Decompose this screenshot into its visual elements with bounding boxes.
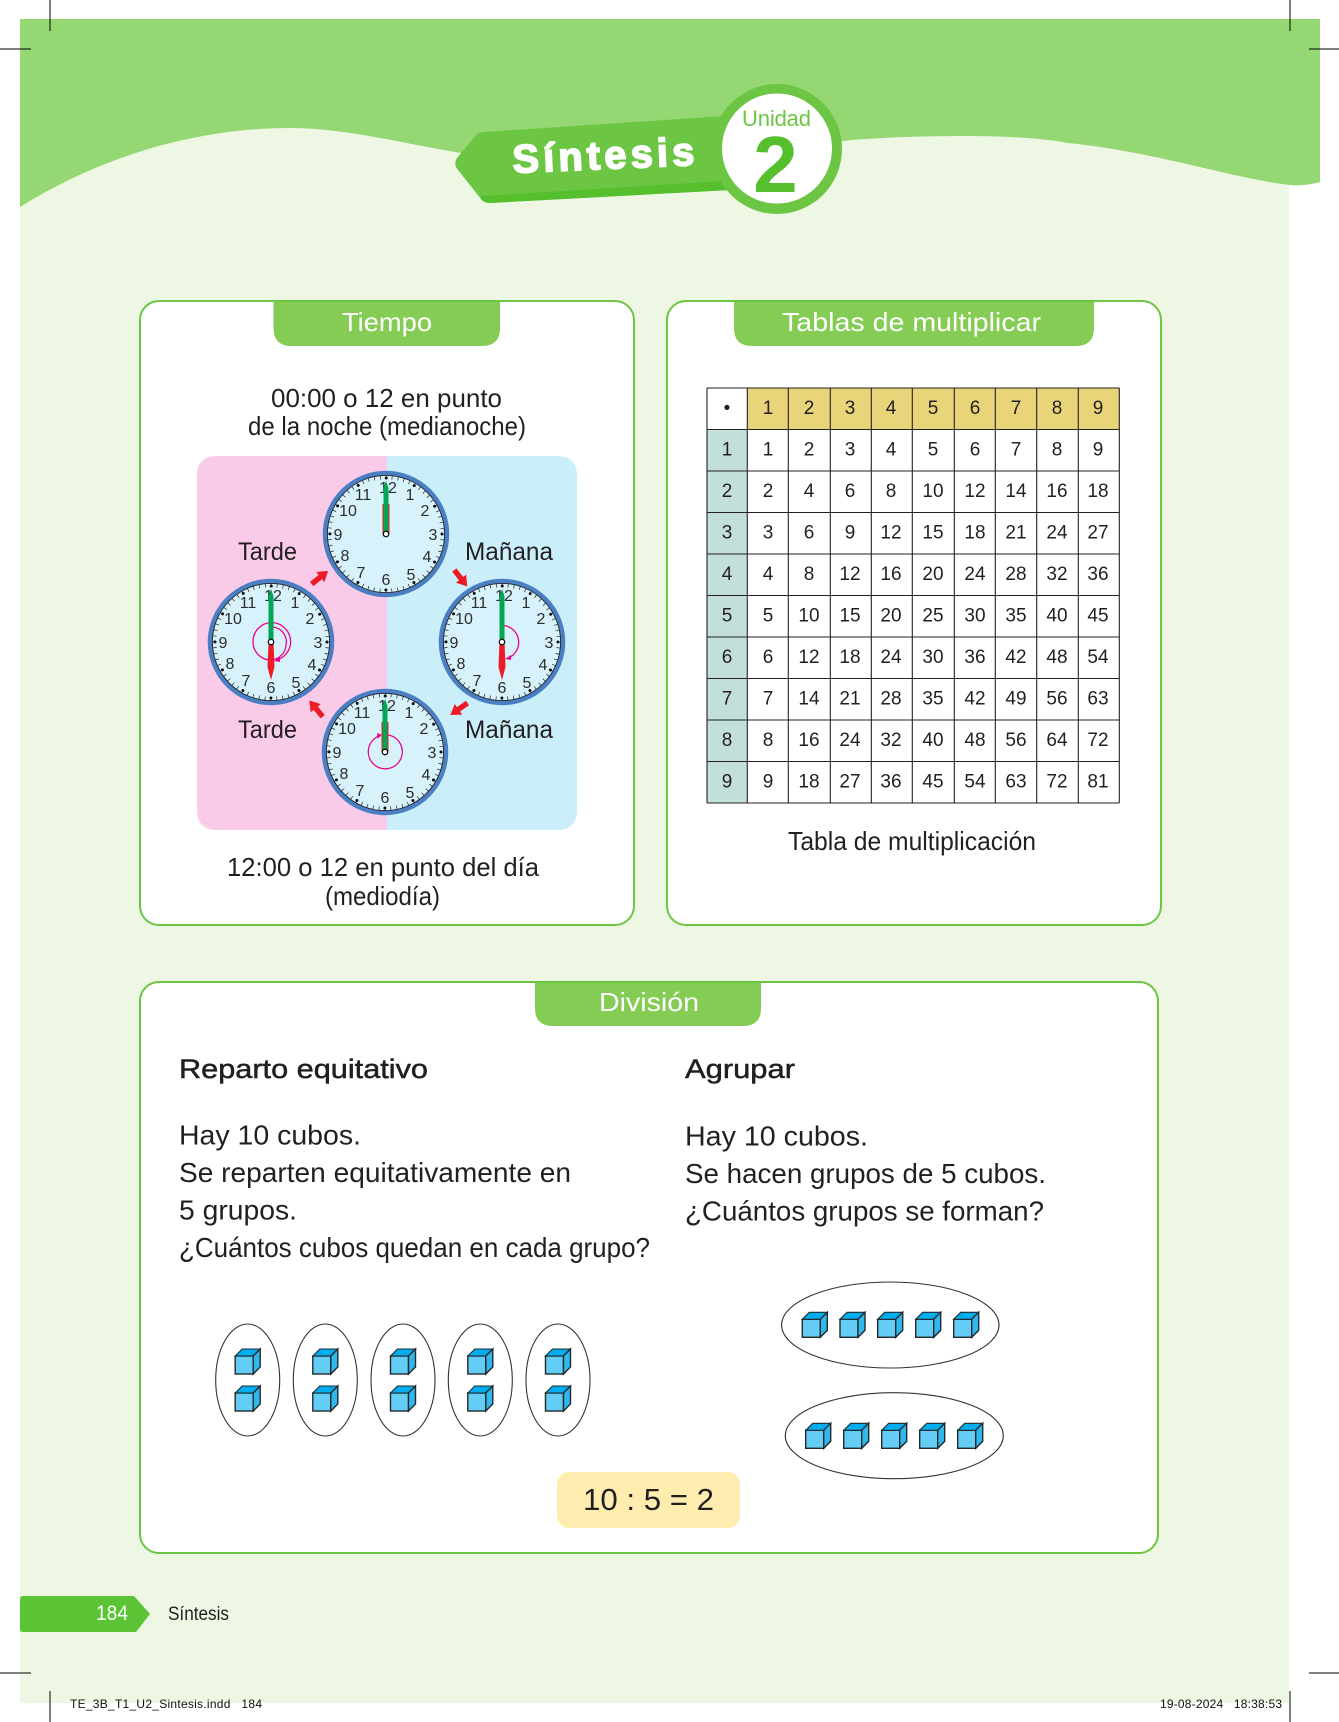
multiplication table: 32 (1046, 564, 1068, 585)
clock: left: 1 (291, 595, 300, 612)
label: Tarde upper: Tarde (238, 538, 297, 566)
subheading: Reparto equitativo: Reparto equitativo (179, 1054, 428, 1084)
clock: left: 7 (242, 673, 251, 690)
text: medianoche (248, 383, 526, 441)
clock: right: 2 (537, 611, 546, 628)
clock: top: 12 (379, 480, 397, 497)
multiplication table: 27 (839, 772, 861, 792)
clock: left: 3 (314, 635, 323, 652)
clock: bottom: 6 (381, 790, 390, 807)
multiplication table: 40 (922, 730, 944, 751)
multiplication table: 2 (722, 481, 732, 502)
equation callout (557, 1472, 740, 1528)
multiplication table: 12 (798, 647, 820, 668)
multiplication table: • (724, 398, 730, 419)
multiplication table: 24 (1046, 522, 1068, 544)
multiplication table: 30 (964, 606, 986, 626)
multiplication table: 30 (922, 647, 944, 668)
multiplication table: 35 (1005, 606, 1027, 626)
heading: Tablas de multiplicar (734, 302, 1094, 346)
multiplication table: 42 (964, 688, 986, 710)
multiplication table (707, 388, 1119, 803)
multiplication table: 2 (804, 398, 814, 419)
multiplication table: 4 (804, 481, 815, 502)
diagram: five groups of two cubes (216, 1324, 590, 1436)
clock: right: 1 (522, 595, 531, 612)
subheading: Agrupar: Agrupar (685, 1054, 795, 1084)
multiplication table: 1 (763, 398, 773, 419)
multiplication table: 54 (964, 772, 986, 792)
multiplication table: 10 (798, 606, 820, 626)
multiplication table: 16 (798, 730, 820, 751)
panel: División (140, 982, 1158, 1553)
multiplication table: 10 (922, 481, 944, 502)
multiplication table: 15 (839, 606, 861, 626)
clock: left: 8 (226, 656, 235, 673)
multiplication table: 5 (928, 440, 938, 460)
label: Mañana upper: Mañana (465, 538, 553, 566)
clock: right: 9 (450, 635, 459, 652)
multiplication table: 6 (970, 398, 980, 419)
multiplication table: 7 (1011, 440, 1021, 460)
multiplication table: 36 (1087, 564, 1109, 585)
multiplication table: 12 (839, 564, 861, 585)
multiplication table: 72 (1046, 772, 1068, 792)
equation callout: 10 : 5 = 2 (583, 1482, 714, 1517)
multiplication table: 56 (1046, 688, 1068, 710)
slug: date: 19-08-2024 18:38:53 (1160, 1697, 1282, 1711)
multiplication table: 48 (1046, 647, 1068, 668)
text block: reparto (179, 1120, 650, 1263)
clock: top: 1 (406, 487, 415, 504)
clock: left: 12 (264, 588, 282, 605)
multiplication table: 4 (722, 564, 733, 585)
clock: top: 7 (357, 565, 366, 582)
multiplication table: 28 (880, 688, 902, 710)
multiplication table: 6 (804, 522, 814, 544)
arrow: top right (449, 566, 472, 591)
heading: Tiempo (274, 302, 500, 346)
multiplication table: 12 (964, 481, 986, 502)
clock: left: 10 (224, 611, 242, 628)
multiplication table: 20 (922, 564, 944, 585)
clock: right: 10 (455, 611, 473, 628)
multiplication table: 64 (1046, 730, 1068, 751)
panel: Tiempo (140, 301, 634, 925)
clock: bottom: 5 (406, 785, 415, 802)
multiplication table: 24 (964, 564, 986, 585)
multiplication table: 54 (1087, 647, 1109, 668)
multiplication table: 9 (763, 772, 773, 792)
multiplication table: 18 (964, 522, 986, 544)
multiplication table: 4 (763, 564, 774, 585)
unit circle (712, 84, 842, 214)
text block: reparto: 5 grupos. (179, 1194, 297, 1226)
header wave (20, 19, 1320, 207)
multiplication table: 27 (1087, 522, 1109, 544)
title text: Síntesis (511, 130, 695, 182)
multiplication table: 6 (845, 481, 855, 502)
multiplication table: 3 (763, 522, 773, 544)
clock: left (210, 581, 332, 703)
multiplication table: 18 (839, 647, 861, 668)
text: mediodía (227, 852, 540, 911)
multiplication table: 36 (964, 647, 986, 668)
clock: right: 6 (498, 680, 507, 697)
ribbon (455, 116, 730, 203)
footer section label: Síntesis (168, 1604, 229, 1625)
slug: file name: TE_3B_T1_U2_Sintesis.indd 184 (70, 1697, 262, 1711)
multiplication table: 16 (1046, 481, 1068, 502)
clock: top: 10 (339, 503, 357, 520)
clock: bottom: 8 (340, 766, 349, 783)
clock: top: 6 (382, 572, 391, 589)
multiplication table: 9 (1093, 398, 1103, 419)
column: Reparto equitativo (179, 1054, 650, 1436)
clock: bottom: 2 (420, 721, 429, 738)
multiplication table: 63 (1005, 772, 1027, 792)
text block: agrupar: Hay 10 cubos. (685, 1120, 868, 1152)
multiplication table: 2 (763, 481, 773, 502)
text block: agrupar (685, 1120, 1046, 1226)
clock: bottom (324, 691, 446, 813)
multiplication table: 18 (1087, 481, 1109, 502)
clock: bottom: 7 (356, 783, 365, 800)
clock: top: 3 (429, 527, 438, 544)
text block: agrupar: Se hacen grupos de 5 cubos. (685, 1158, 1046, 1189)
multiplication table: 8 (804, 564, 814, 585)
multiplication table: 21 (1005, 522, 1027, 544)
multiplication table: 5 (722, 606, 732, 626)
clock: bottom: 10 (338, 721, 356, 738)
ribbon shadow (481, 181, 730, 203)
multiplication table: 16 (880, 564, 902, 585)
diagram: two groups of five cubes (782, 1282, 1003, 1479)
multiplication table: 42 (1005, 647, 1027, 668)
multiplication table: 81 (1087, 772, 1109, 792)
label: Mañana lower: Mañana (465, 716, 553, 744)
text: mediodía: (mediodía) (325, 881, 440, 911)
clock: right: 12 (495, 588, 513, 605)
multiplication table: 24 (880, 647, 902, 668)
unit circle: 2 (753, 120, 798, 209)
multiplication table: 8 (1052, 440, 1062, 460)
clock: bottom: 4 (422, 767, 431, 784)
multiplication table: 3 (845, 440, 855, 460)
clock: top: 8 (341, 548, 350, 565)
arrow: bottom right (447, 698, 471, 720)
multiplication table: 8 (722, 730, 732, 751)
multiplication table: 4 (886, 440, 897, 460)
multiplication table: 20 (880, 606, 902, 626)
clock: top: 2 (421, 503, 430, 520)
multiplication table: 45 (922, 772, 944, 792)
heading: División (535, 983, 761, 1026)
clock: right: 3 (545, 635, 554, 652)
multiplication table: 35 (922, 688, 944, 710)
multiplication table: 18 (798, 772, 820, 792)
multiplication table: 6 (763, 647, 773, 668)
clock: bottom: 9 (333, 745, 342, 762)
clock: left: 9 (219, 635, 228, 652)
clock: left: 5 (292, 675, 301, 692)
text: medianoche: 00:00 o 12 en punto (271, 383, 502, 413)
multiplication table: 3 (722, 522, 732, 544)
multiplication table: 8 (1052, 398, 1062, 419)
title badge (455, 84, 842, 214)
multiplication table: 28 (1005, 564, 1027, 585)
multiplication table: 40 (1046, 606, 1068, 626)
clock: top: 11 (355, 487, 371, 504)
text: medianoche: de la noche (medianoche) (248, 411, 526, 441)
multiplication table: 49 (1005, 688, 1027, 710)
multiplication table: 25 (922, 606, 944, 626)
text block: reparto: ¿Cuántos cubos quedan en cada grupo? (179, 1232, 650, 1263)
multiplication table: 7 (763, 688, 773, 710)
heading: Tiempo: Tiempo (342, 307, 432, 337)
clock: top: 5 (407, 567, 416, 584)
clock: right: 11 (471, 595, 487, 612)
multiplication table: 4 (886, 398, 897, 419)
clock: right: 4 (539, 657, 548, 674)
multiplication table: 12 (880, 522, 902, 544)
multiplication table: 2 (804, 440, 814, 460)
multiplication table: 7 (722, 688, 732, 710)
clock: right: 5 (523, 675, 532, 692)
panel: Tablas de multiplicar (667, 301, 1161, 925)
label: Tarde lower: Tarde (238, 716, 297, 744)
clock: bottom: 11 (354, 705, 370, 722)
multiplication table: 9 (1093, 440, 1103, 460)
clock: right (441, 581, 563, 703)
clock: top (325, 473, 447, 595)
multiplication table: 1 (763, 440, 773, 460)
column: Agrupar (685, 1054, 1046, 1479)
multiplication table: 5 (763, 606, 773, 626)
multiplication table: 6 (970, 440, 980, 460)
text: mediodía: 12:00 o 12 en punto del día (227, 852, 540, 882)
multiplication table: 36 (880, 772, 902, 792)
footer page tab: 184 (96, 1602, 128, 1625)
multiplication table: 56 (1005, 730, 1027, 751)
multiplication table: 6 (722, 647, 732, 668)
multiplication table: 1 (722, 440, 732, 460)
clock: bottom: 3 (428, 745, 437, 762)
clock: bottom: 12 (378, 698, 396, 715)
arrow: bottom left (304, 696, 328, 721)
clock: right: 7 (473, 673, 482, 690)
clock: bottom: 1 (405, 705, 414, 722)
text block: reparto: Hay 10 cubos. (179, 1120, 361, 1150)
arrow: top left (308, 566, 332, 589)
clock: right: 8 (457, 656, 466, 673)
table caption: Tabla de multiplicación (788, 826, 1036, 856)
multiplication table: 24 (839, 730, 861, 751)
multiplication table: 21 (839, 688, 861, 710)
clock: left: 11 (240, 595, 256, 612)
multiplication table: 63 (1087, 688, 1109, 710)
multiplication table: 5 (928, 398, 938, 419)
multiplication table: 7 (1011, 398, 1021, 419)
multiplication table: 14 (1005, 481, 1027, 502)
clock: left: 2 (306, 611, 315, 628)
multiplication table: 72 (1087, 730, 1109, 751)
multiplication table: 45 (1087, 606, 1109, 626)
multiplication table: 48 (964, 730, 986, 751)
multiplication table: 8 (886, 481, 896, 502)
clock: top: 4 (423, 549, 432, 566)
multiplication table: 15 (922, 522, 944, 544)
footer page tab (20, 1596, 150, 1632)
heading: Tablas de multiplicar: Tablas de multiplicar (782, 307, 1041, 337)
unit circle: Unidad (742, 106, 811, 131)
clock: left: 4 (308, 657, 317, 674)
clock: top: 9 (334, 527, 343, 544)
multiplication table: 3 (845, 398, 855, 419)
clock cycle background (197, 456, 577, 830)
multiplication table: 8 (763, 730, 773, 751)
clock: left: 6 (267, 680, 276, 697)
multiplication table: 9 (845, 522, 855, 544)
multiplication table: 32 (880, 730, 902, 751)
multiplication table: 14 (798, 688, 820, 710)
multiplication table: 9 (722, 772, 732, 792)
heading: División: División (599, 987, 699, 1017)
text block: agrupar: ¿Cuántos grupos se forman? (685, 1196, 1044, 1226)
text block: reparto: Se reparten equitativamente en (179, 1157, 571, 1188)
